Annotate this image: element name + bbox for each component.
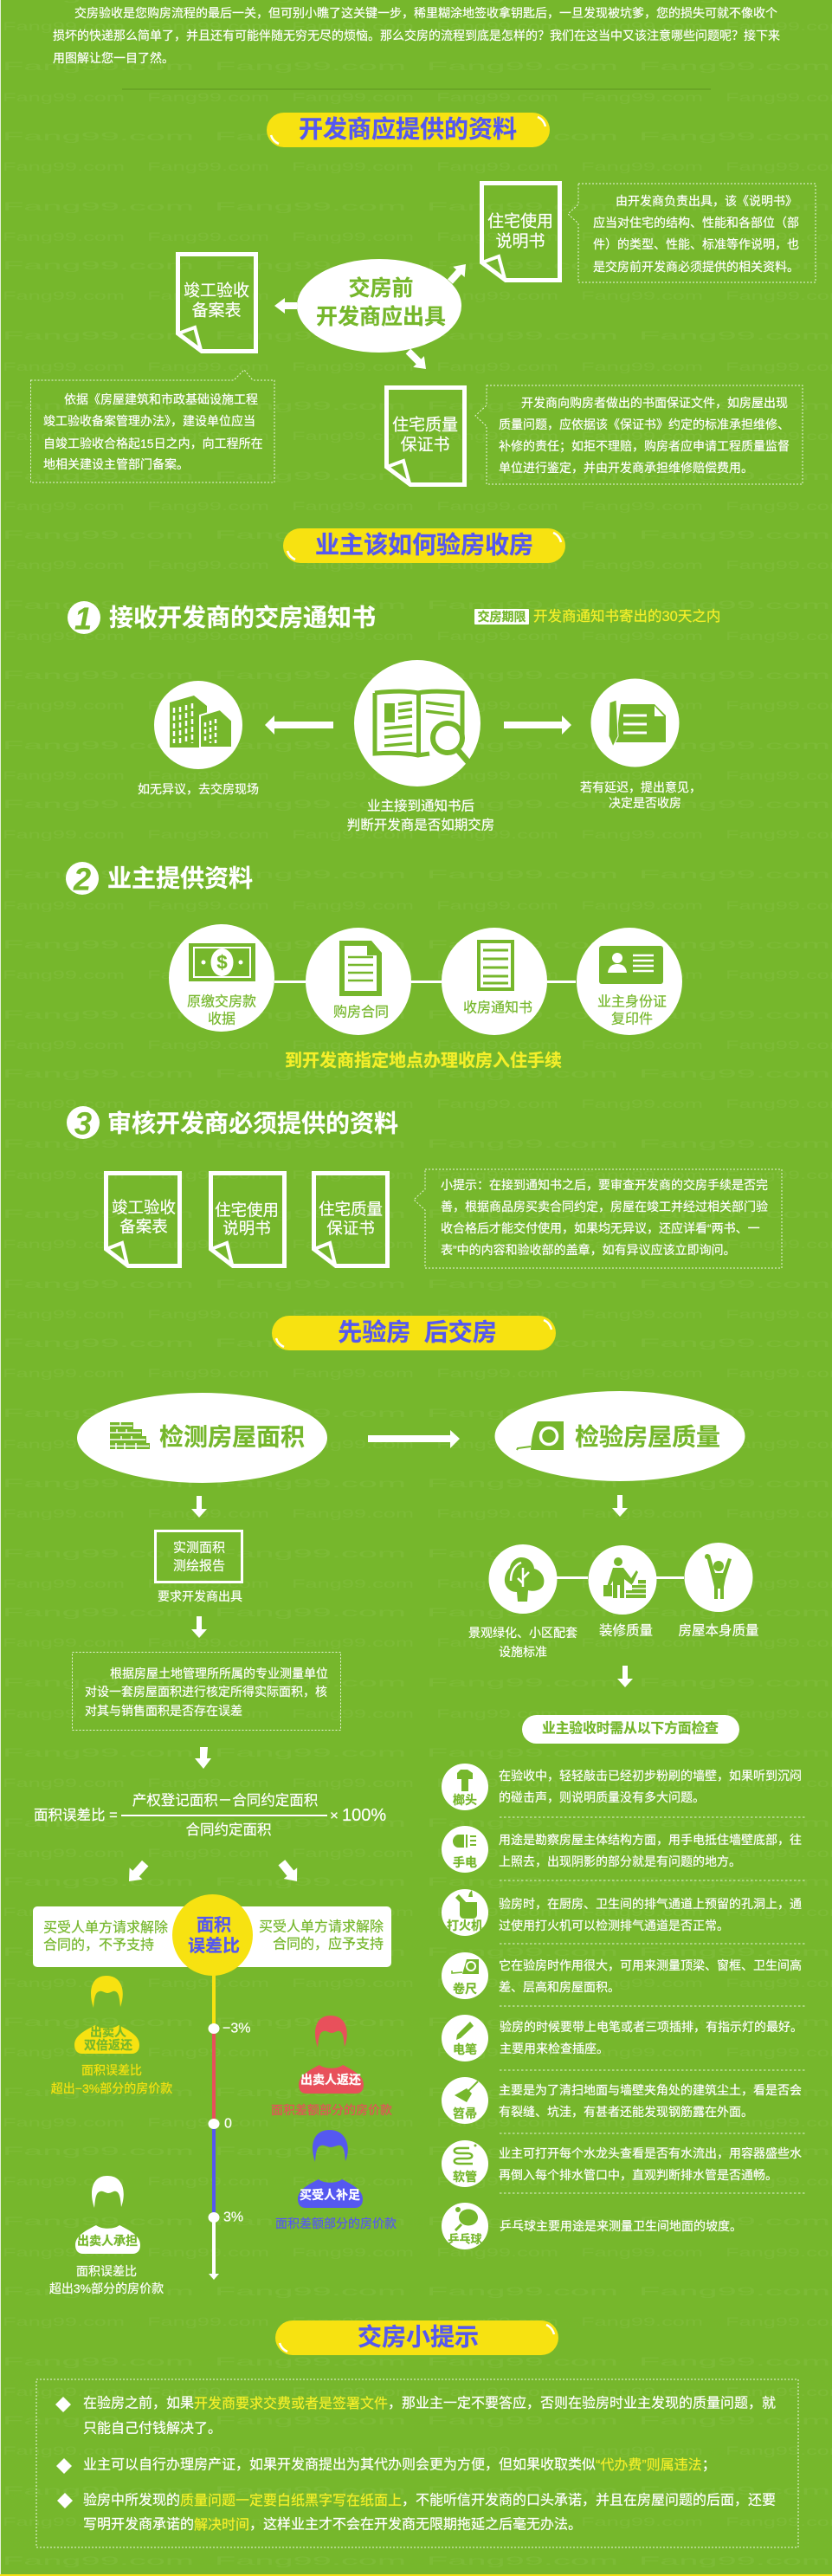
callout: 备案表	[31, 370, 274, 482]
step 2 heading: 业主提供资料	[107, 864, 253, 892]
document: 住宅质量保证书 small: 保证书	[326, 1220, 375, 1237]
tool: 软管: 软管	[453, 2170, 477, 2184]
callout: 测量说明: 根据房屋土地管理所所属的专业测量单位	[110, 1667, 328, 1680]
tool: 笤帚	[442, 2077, 488, 2124]
yellow circle: 面积误差比: 面积	[197, 1915, 231, 1935]
ellipse: 检测房屋面积: 检测房屋面积	[159, 1424, 305, 1450]
person: 买受人补足: 买受人补足	[300, 2188, 360, 2202]
item: 原缴交房款收据: $	[216, 951, 228, 974]
callout: 说明书: 由开发商负责出具，该《说明书》	[616, 194, 797, 208]
tool: 软管	[442, 2140, 488, 2187]
arrow to 住宅使用说明书	[444, 259, 472, 287]
callout: 保证书: 单位进行鉴定，并由开发商承担维修赔偿费用。	[499, 461, 753, 475]
ellipse: 检验房屋质量	[495, 1391, 745, 1481]
formula: 合同约定面积	[185, 1822, 272, 1838]
tool: 笤帚: 笤帚	[453, 2107, 477, 2120]
heading pill: 先验房 后交房: 先验房 后交房	[338, 1318, 497, 1346]
tool: 手电: 手电	[453, 1855, 477, 1869]
tool description: 卷尺	[499, 1958, 802, 1994]
tool: 卷尺: 卷尺	[453, 1982, 477, 1996]
tool: 榔头: 榔头	[453, 1793, 477, 1807]
report box: 测绘报告	[173, 1559, 225, 1573]
tool: 电笔	[442, 2015, 488, 2061]
callout: 备案表: 自竣工验收合格起15日之内，向工程所在	[43, 437, 263, 450]
heading pill: 交房小提示: 交房小提示	[358, 2323, 479, 2351]
tips panel: 写明开发商承诺的解决时间，这样业主才不会在开发商无限期拖延之后毫无办法。	[83, 2515, 582, 2533]
heading pill: 业主该如何验房收房: 业主该如何验房收房	[315, 532, 533, 558]
label: 要求开发商出具: 要求开发商出具	[158, 1589, 242, 1603]
callout: 说明书	[568, 184, 816, 282]
heading pill: 业主该如何验房收房	[283, 528, 565, 563]
person: 出卖人双倍返还	[51, 1976, 172, 2095]
tips panel: 只能自己付钱解决了。	[83, 2420, 222, 2436]
item: 收房通知书: 收房通知书	[463, 1000, 532, 1015]
tips panel: 在验房之前，如果开发商要求交费或者是签署文件，那业主一定不要答应，否则在验房时业主发现的质量问题，就	[83, 2394, 776, 2411]
tool description: 榔头	[499, 1769, 802, 1804]
tool description: 笤帚	[499, 2083, 802, 2119]
report box	[156, 1531, 242, 1582]
intro paragraph: 交房验收是您购房流程的最后一关，但可别小瞧了这关键一步，稀里糊涂地签收拿钥匙后，一旦发现被坑爹，您的损失可就不像收个	[74, 6, 777, 20]
tool description: 打火机: 验房时，在厨房、卫生间的排气通道上预留的孔洞上，通	[499, 1897, 802, 1911]
white bar with conditions: 合同的，应予支持	[273, 1935, 384, 1952]
document: 住宅质量保证书: 住宅质量	[392, 416, 458, 435]
person: 出卖人承担	[49, 2176, 164, 2295]
labels for step 1: 如无异议，去交房现场	[138, 782, 259, 796]
item: 购房合同	[306, 928, 411, 1035]
document: 竣工验收备案表: 竣工验收	[184, 281, 249, 300]
callout: 说明书: 应当对住宅的结构、性能和各部位（部	[593, 216, 799, 230]
tool description: 电笔: 验房的时候要带上电笔或者三项插排，有指示灯的最好。	[500, 2020, 803, 2034]
arrow down	[617, 1666, 633, 1687]
white bar with conditions: 合同的，不予支持	[43, 1937, 154, 1952]
document: 住宅质量保证书 small: 住宅质量	[319, 1201, 383, 1218]
labels under quality circles: 景观绿化、小区配套	[468, 1626, 577, 1640]
arrow: down-left	[123, 1858, 152, 1887]
heading pill: 交房小提示	[275, 2320, 558, 2355]
person: 出卖人双倍返还: 双倍返还	[84, 2038, 132, 2052]
document: 住宅使用说明书 small	[211, 1173, 284, 1266]
deadline tag: 开发商通知书寄出的30天之内	[533, 608, 720, 625]
item: 原缴交房款收据	[169, 924, 274, 1032]
labels under quality circles	[468, 1623, 759, 1659]
labels for step 1: 业主接到通知书后	[367, 799, 474, 814]
document: 竣工验收备案表 small: 备案表	[119, 1218, 168, 1235]
callout: 备案表: 地相关建设主管部门备案。	[43, 457, 189, 471]
arrow: down-right	[275, 1857, 304, 1887]
formula	[34, 1792, 386, 1838]
yellow note: 到开发商指定地点办理收房入住手续	[285, 1050, 562, 1071]
callout: 备案表: 竣工验收备案管理办法》，建设单位应当	[43, 414, 255, 428]
pill: 业主验收时需从以下方面检查: 业主验收时需从以下方面检查	[542, 1720, 719, 1736]
white bar with conditions: 买受人单方请求解除	[43, 1919, 168, 1935]
callout: 保证书: 开发商向购房者做出的书面保证文件，如房屋出现	[521, 396, 788, 410]
person: 买受人补足	[275, 2130, 397, 2230]
formula: 产权登记面积－合同约定面积	[132, 1792, 318, 1809]
tool description: 打火机	[499, 1897, 802, 1932]
tips panel: 验房中所发现的质量问题一定要白纸黑字写在纸面上，不能听信开发商的口头承诺，并且在房屋问题的后面，还要	[83, 2493, 776, 2508]
tool description: 榔头: 的碰击声，则说明质量没有多大问题。	[499, 1790, 705, 1804]
item: 收房通知书	[442, 928, 547, 1035]
tool: 乒乓球: 乒乓球	[448, 2233, 482, 2245]
item: 业主身份证复印件: 业主身份证	[597, 994, 667, 1010]
item: 购房合同: 购房合同	[333, 1005, 389, 1020]
central ellipse: 交房前开发商应出具: 开发商应出具	[316, 304, 446, 329]
arrow down	[191, 1616, 207, 1638]
intro paragraph: 损坏的快递那么简单了，并且还有可能伴随无穷无尽的烦恼。那么交房的流程到底是怎样的？我们在这当中又该注意哪些问题呢？接下来	[53, 29, 780, 42]
tool description: 软管	[499, 2146, 802, 2182]
arrow to 竣工验收备案表	[274, 298, 297, 314]
step 3 heading: 3	[74, 1105, 92, 1142]
tool description: 笤帚: 有裂缝、坑洼，有甚者还能发现钢筋露在外面。	[499, 2105, 753, 2119]
report box: 实测面积	[173, 1540, 225, 1556]
labels for step 1: 判断开发商是否如期交房	[347, 818, 494, 833]
tool description: 电笔	[500, 2020, 803, 2055]
tool: 手电	[442, 1826, 488, 1873]
tool description: 电笔: 主要用来检查插座。	[500, 2042, 609, 2055]
timeline axis: 3%	[223, 2210, 243, 2224]
arrow to 住宅质量保证书	[403, 346, 431, 374]
arrow: 面积 to 质量	[368, 1430, 460, 1448]
intro paragraph: 用图解让您一目了然。	[53, 51, 174, 65]
tool: 榔头	[442, 1764, 488, 1810]
labels for step 1: 决定是否收房	[609, 796, 681, 810]
document: 住宅质量保证书 small	[313, 1173, 388, 1266]
person: 出卖人承担: 出卖人承担	[77, 2234, 138, 2248]
timeline axis	[208, 1973, 250, 2280]
callout: 保证书	[475, 385, 803, 484]
callout: 测量说明: 对设一套房屋面积进行核定所得实际面积，核	[85, 1685, 327, 1699]
person: 出卖人承担: 超出3%部分的房价款	[49, 2282, 164, 2295]
document: 竣工验收备案表	[178, 255, 256, 352]
person: 买受人补足: 面积差额部分的房价款	[275, 2217, 397, 2230]
tool: 电笔: 电笔	[453, 2042, 477, 2056]
tool: 打火机	[442, 1889, 488, 1936]
timeline axis: −3%	[223, 2022, 250, 2036]
person: 出卖人承担: 面积误差比	[76, 2264, 137, 2278]
document: 竣工验收备案表 small	[106, 1173, 180, 1266]
callout: 小提示	[414, 1169, 782, 1268]
document: 住宅质量保证书: 保证书	[400, 435, 450, 454]
item: 原缴交房款收据: 收据	[208, 1012, 235, 1027]
tips panel: 业主可以自行办理房产证，如果开发商提出为其代办则会更为方便，但如果收取类似“代办费”则属违法；	[83, 2456, 716, 2472]
icon: book and magnifier	[354, 660, 480, 786]
step 3 heading	[67, 1105, 398, 1142]
callout: 保证书: 质量问题，应依据该《保证书》约定的标准承担维修、	[499, 417, 790, 431]
callout: 小提示: 表”中的内容和验收部的盖章，如有异议应该立即询问。	[441, 1243, 736, 1257]
step 2 heading	[66, 861, 253, 897]
tool: 乒乓球	[442, 2203, 488, 2249]
icon: pen and paper	[590, 679, 679, 767]
callout: 测量说明: 对其与销售面积是否存在误差	[85, 1704, 242, 1718]
item: 业主身份证复印件	[577, 928, 682, 1035]
tool description: 打火机: 过使用打火机可以检测排气通道是否正常。	[499, 1919, 729, 1932]
tool description: 手电: 用途是勘察房屋主体结构方面，用手电抵住墙壁底部，往	[499, 1833, 802, 1847]
callout: 说明书: 是交房前开发商必须提供的相关资料。	[593, 260, 799, 274]
labels under quality circles: 设施标准	[499, 1645, 547, 1659]
formula: 100%	[342, 1806, 386, 1825]
timeline axis: 0	[224, 2117, 232, 2131]
person: 出卖人双倍返还: 超出−3%部分的房价款	[51, 2081, 172, 2095]
callout: 测量说明	[73, 1653, 341, 1731]
formula: 面积误差比 =	[34, 1807, 118, 1823]
step 1 heading: 1	[74, 601, 92, 636]
document: 住宅质量保证书	[386, 388, 464, 485]
labels for step 1	[138, 780, 701, 833]
tool: 卷尺	[442, 1952, 488, 1999]
arrow down	[612, 1495, 628, 1517]
ellipse: 检测房屋面积	[77, 1393, 327, 1483]
icon: person holding frame	[684, 1543, 753, 1612]
document: 住宅使用说明书 small: 住宅使用	[215, 1201, 279, 1220]
callout: 说明书: 件）的类型、性能、标准等作说明，也	[593, 237, 799, 251]
pill: 业主验收时需从以下方面检查	[522, 1715, 739, 1744]
labels for step 1: 若有延迟，提出意见，	[580, 780, 701, 794]
person: 出卖人返还: 出卖人返还	[300, 2073, 361, 2087]
deadline tag: 交房期限	[478, 610, 526, 624]
labels under quality circles: 房屋本身质量	[678, 1623, 759, 1639]
yellow circle: 面积误差比: 误差比	[188, 1936, 240, 1956]
yellow circle: 面积误差比	[172, 1894, 253, 1976]
white bar with conditions	[33, 1906, 391, 1967]
icon: buildings	[154, 681, 242, 769]
person: 出卖人返还	[271, 2016, 392, 2117]
central ellipse: 交房前开发商应出具: 交房前	[348, 276, 414, 301]
icon: worker with bricks	[589, 1545, 656, 1615]
arrow down	[191, 1496, 207, 1518]
tool: 打火机: 打火机	[447, 1919, 483, 1932]
tool description: 手电	[499, 1833, 802, 1868]
tool description: 榔头: 在验收中，轻轻敲击已经初步粉刷的墙壁，如果听到沉闷	[499, 1769, 802, 1783]
item: 原缴交房款收据: 原缴交房款	[187, 994, 256, 1010]
icon: tree	[488, 1544, 558, 1614]
central ellipse: 交房前开发商应出具	[297, 259, 461, 353]
white bar with conditions: 买受人单方请求解除	[259, 1919, 384, 1935]
step 2 heading: 2	[73, 861, 91, 897]
intro paragraph	[53, 6, 780, 65]
item: 业主身份证复印件: 复印件	[611, 1012, 653, 1027]
document: 竣工验收备案表 small: 竣工验收	[112, 1199, 176, 1216]
tool description: 软管: 再倒入每个排水管口中，直观判断排水管是否通畅。	[499, 2168, 777, 2182]
step 3 heading: 审核开发商必须提供的资料	[107, 1110, 398, 1136]
arrow left	[265, 715, 333, 735]
document: 住宅使用说明书	[481, 184, 559, 281]
tool description: 笤帚: 主要是为了清扫地面与墙壁夹角处的建筑尘土，看是否会	[499, 2083, 802, 2097]
document: 住宅使用说明书 small: 说明书	[223, 1220, 271, 1237]
step 1 heading: 接收开发商的交房通知书	[109, 605, 376, 631]
callout: 小提示: 善，根据商品房买卖合同约定，房屋在竣工并经过相关部门验	[441, 1200, 768, 1214]
arrow right	[504, 715, 571, 735]
arrow down to formula	[195, 1747, 211, 1769]
callout: 小提示: 小提示：在接到通知书之后，要审查开发商的交房手续是否完	[441, 1178, 768, 1192]
labels under quality circles: 装修质量	[599, 1623, 653, 1639]
person: 出卖人返还: 面积差额部分的房价款	[271, 2103, 392, 2117]
person: 出卖人双倍返还: 面积误差比	[81, 2063, 142, 2077]
formula: ×	[330, 1807, 339, 1824]
document: 竣工验收备案表: 备案表	[191, 301, 242, 320]
tips panel	[36, 2379, 798, 2547]
callout: 保证书: 补修的责任；如拒不理赔，购房者应申请工程质量监督	[499, 439, 790, 454]
tool description: 卷尺: 它在验房时作用很大，可用来测量顶梁、窗框、卫生间高	[499, 1958, 802, 1972]
callout: 备案表: 依据《房屋建筑和市政基础设施工程	[64, 392, 258, 406]
tool description: 软管: 业主可打开每个水龙头查看是否有水流出，用容器盛些水	[499, 2146, 802, 2160]
document: 住宅使用说明书: 住宅使用	[487, 211, 553, 230]
tool description: 手电: 上照去，出现阴影的部分就是有问题的地方。	[499, 1854, 741, 1868]
heading pill: 开发商应提供的资料	[267, 113, 550, 147]
document: 住宅使用说明书: 说明书	[495, 232, 545, 251]
step 1 heading	[68, 601, 376, 636]
heading pill: 开发商应提供的资料: 开发商应提供的资料	[299, 116, 517, 142]
person: 出卖人双倍返还: 出卖人	[90, 2025, 126, 2039]
ellipse: 检验房屋质量: 检验房屋质量	[575, 1424, 720, 1450]
tool description: 乒乓球: 乒乓球主要用途是来测量卫生间地面的坡度。	[500, 2219, 742, 2233]
tool description: 卷尺: 差、层高和房屋面积。	[499, 1980, 620, 1994]
callout: 小提示: 收合格后才能交付使用，如果均无异议，还应详看“两书、一	[441, 1221, 760, 1235]
heading pill: 先验房 后交房	[272, 1316, 556, 1350]
